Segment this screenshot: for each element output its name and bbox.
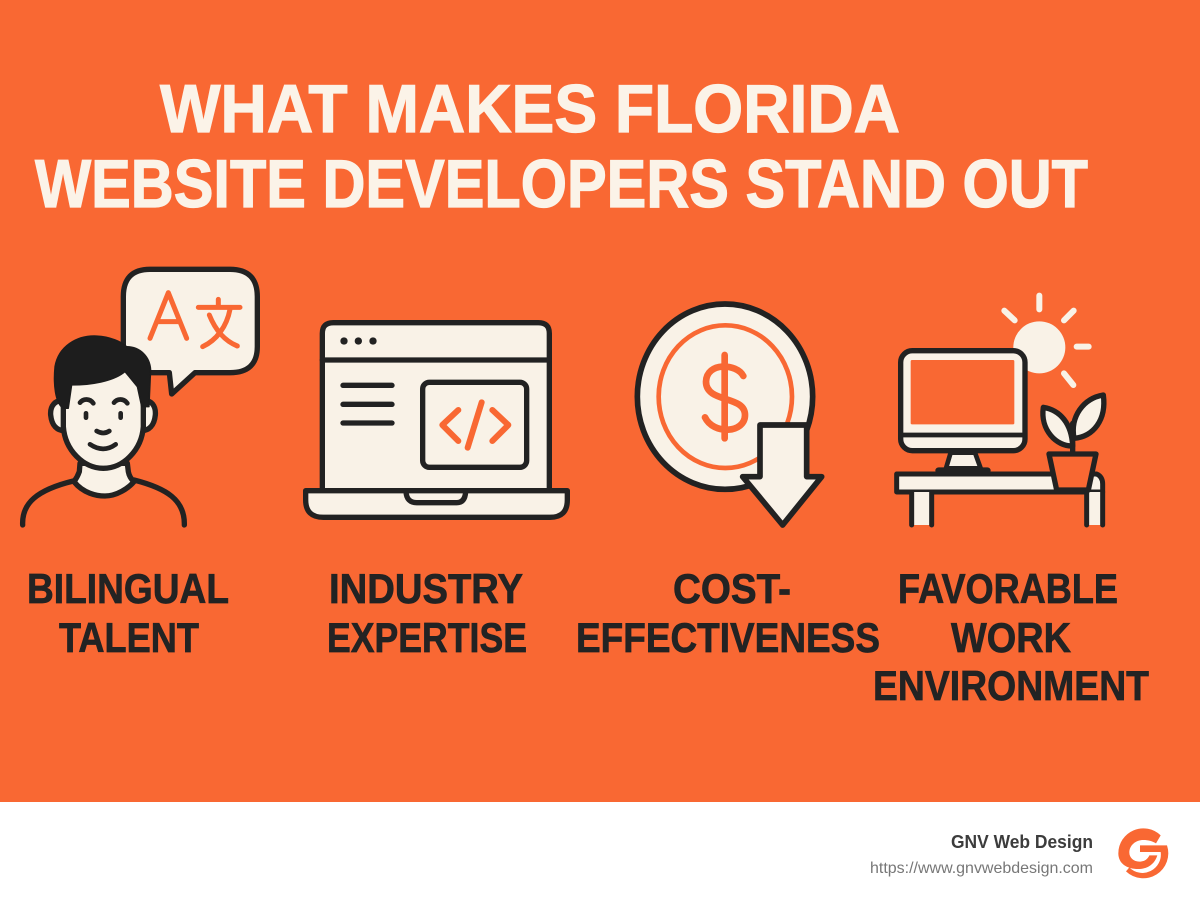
window dots [340, 337, 377, 345]
footer brand text [870, 832, 1093, 877]
dollar sign [705, 355, 745, 438]
code symbol [442, 402, 508, 448]
label: industry expertise: EXPERTISE [327, 614, 527, 661]
speech bubble [123, 269, 257, 394]
label: cost-effectiveness [576, 565, 880, 661]
label: bilingual talent: BILINGUAL [27, 565, 229, 612]
face [63, 363, 143, 468]
code box [423, 382, 527, 467]
plant [1043, 395, 1104, 490]
translate glyphs [150, 293, 240, 347]
ears [51, 401, 155, 431]
desk [897, 469, 1103, 525]
footer brand text: GNV Web Design [951, 832, 1093, 852]
hair [54, 336, 151, 408]
label: industry expertise [327, 565, 527, 661]
label: cost-effectiveness: EFFECTIVENESS [576, 614, 880, 661]
neck [74, 463, 134, 496]
coin ring [659, 325, 792, 468]
laptop screen [322, 323, 549, 491]
monitor stand [946, 453, 981, 468]
label: favorable work environment [873, 565, 1149, 709]
label: favorable work environment: ENVIRONMENT [873, 662, 1149, 709]
monitor [901, 351, 1025, 451]
title: WHAT MAKES FLORIDA [160, 71, 900, 147]
icon: desk with monitor, sun and plant [897, 296, 1104, 525]
label: cost-effectiveness: COST- [673, 565, 791, 612]
laptop base [306, 491, 567, 517]
footer logo [1118, 828, 1168, 878]
label: favorable work environment: FAVORABLE [898, 565, 1118, 612]
coin [637, 304, 813, 489]
label: bilingual talent [27, 565, 229, 661]
sun [1004, 296, 1089, 385]
icon: dollar coin with down arrow [637, 304, 822, 525]
label: industry expertise: INDUSTRY [329, 565, 523, 612]
title [35, 71, 1088, 222]
footer brand text: https://www.gnvwebdesign.com [870, 860, 1093, 877]
shoulders [23, 480, 184, 525]
label: favorable work environment: WORK [951, 614, 1071, 661]
label: bilingual talent: TALENT [59, 614, 199, 661]
facial features [80, 399, 127, 449]
text lines [343, 385, 392, 423]
icon: bilingual person with speech bubble [23, 269, 257, 525]
down arrow [743, 425, 822, 525]
icon: laptop with code window [306, 323, 567, 517]
